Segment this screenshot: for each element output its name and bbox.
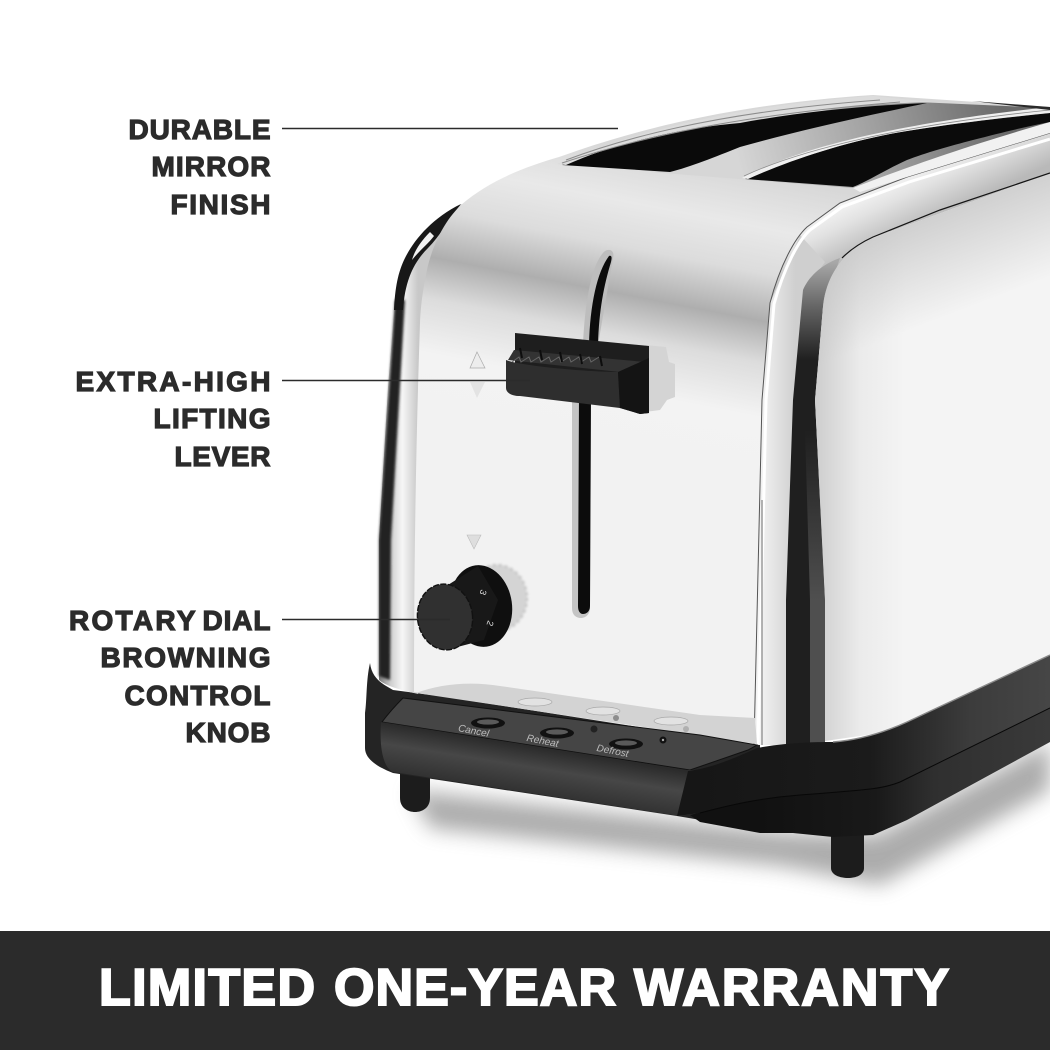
lever reflection	[645, 345, 675, 412]
lever ridge highlight	[512, 357, 599, 362]
rim highlight sliver	[412, 232, 434, 260]
dark strip	[786, 258, 840, 745]
toast slot right	[745, 113, 1050, 187]
silver strip between slots	[650, 100, 1050, 188]
indicator lights	[590, 715, 689, 744]
callout: rotary dial browning control knob	[69, 605, 270, 748]
lifting lever	[506, 333, 649, 414]
warranty banner	[0, 931, 1050, 1050]
dial arrow	[467, 535, 481, 549]
callout: durable mirror finish: DURABLE	[128, 114, 270, 145]
dark strip grey part	[805, 430, 825, 745]
strip below right slot	[853, 122, 1050, 192]
callout: durable mirror finish	[128, 114, 270, 220]
button labels	[457, 723, 631, 760]
callout: durable mirror finish: MIRROR	[152, 151, 270, 182]
side panel top line	[842, 173, 1050, 258]
browning dial knob	[413, 561, 527, 654]
warranty text: LIMITED	[99, 959, 315, 1017]
browning dial knob: 2	[485, 619, 496, 627]
toaster illustration	[365, 95, 1050, 885]
lever front	[506, 360, 620, 408]
dial front	[413, 580, 477, 654]
right slot lip line	[744, 110, 1050, 176]
corner edge dark line	[754, 133, 1050, 745]
lever ridges	[508, 350, 645, 372]
warranty text: ONE-YEAR	[334, 959, 616, 1017]
corner band right	[754, 235, 825, 745]
lower edge grey line	[761, 500, 763, 745]
corner edge white line	[758, 139, 1050, 745]
lever slot lower	[572, 395, 591, 618]
corner band top	[770, 133, 1050, 320]
left foot	[400, 770, 430, 812]
rim dark lower strip	[379, 300, 405, 680]
dark silhouette top right	[972, 101, 1050, 110]
button labels: Defrost	[596, 743, 631, 760]
button labels: Reheat	[526, 733, 561, 750]
front and top chrome face	[414, 95, 1050, 745]
right base lower band	[690, 708, 1050, 837]
callout: rotary dial browning control knob: KNOB	[186, 717, 270, 748]
callout: extra-high lifting lever	[76, 366, 270, 472]
chrome lip of right slot	[742, 107, 1050, 179]
callout: rotary dial browning control knob: ROTARY	[69, 605, 196, 636]
side panel	[815, 173, 1050, 741]
callout lines	[282, 128, 618, 620]
lever slot upper dark	[589, 256, 612, 345]
base rear and left bumper	[365, 663, 760, 830]
toast slot left	[562, 103, 927, 172]
left slot lip lines	[562, 100, 900, 163]
callout: extra-high lifting lever: LIFTING	[154, 403, 270, 434]
lever slot upper chrome	[583, 250, 613, 345]
control buttons	[471, 718, 643, 750]
dial numbers: 3	[478, 588, 489, 596]
warranty text: WARRANTY	[634, 959, 949, 1017]
side panel top shade	[815, 173, 1050, 400]
front lip of base	[381, 722, 700, 816]
reflected buttons	[518, 698, 688, 725]
callout: rotary dial browning control knob: CONTROL	[124, 680, 270, 711]
dial collar	[445, 561, 517, 651]
lever slot lower dark	[578, 395, 591, 614]
callout: durable mirror finish: FINISH	[170, 189, 270, 220]
dial neck	[440, 566, 498, 650]
base seam line	[700, 708, 1050, 813]
ground shadow	[410, 742, 1050, 885]
reflection of control panel	[416, 684, 757, 744]
right foot	[831, 830, 864, 878]
lever right side	[618, 358, 649, 414]
callout: extra-high lifting lever: LEVER	[174, 441, 270, 472]
callout: rotary dial browning control knob: BROWNING	[100, 642, 270, 673]
lever ridge notches	[520, 348, 602, 366]
left chrome rim	[379, 204, 470, 694]
lever back	[515, 333, 649, 414]
callout: rotary dial browning control knob: DIAL	[202, 605, 270, 636]
lever up arrow	[470, 352, 485, 368]
front control plate top	[382, 698, 757, 770]
dial reflection	[467, 565, 527, 631]
callout: extra-high lifting lever: EXTRA-HIGH	[76, 366, 270, 397]
button labels: Cancel	[457, 723, 491, 740]
right base upper band	[677, 655, 1050, 816]
chrome lip of left slot	[557, 96, 932, 165]
base top highlight	[833, 655, 1050, 742]
rim dark curved strip	[394, 204, 461, 310]
lever down arrow	[470, 382, 485, 398]
